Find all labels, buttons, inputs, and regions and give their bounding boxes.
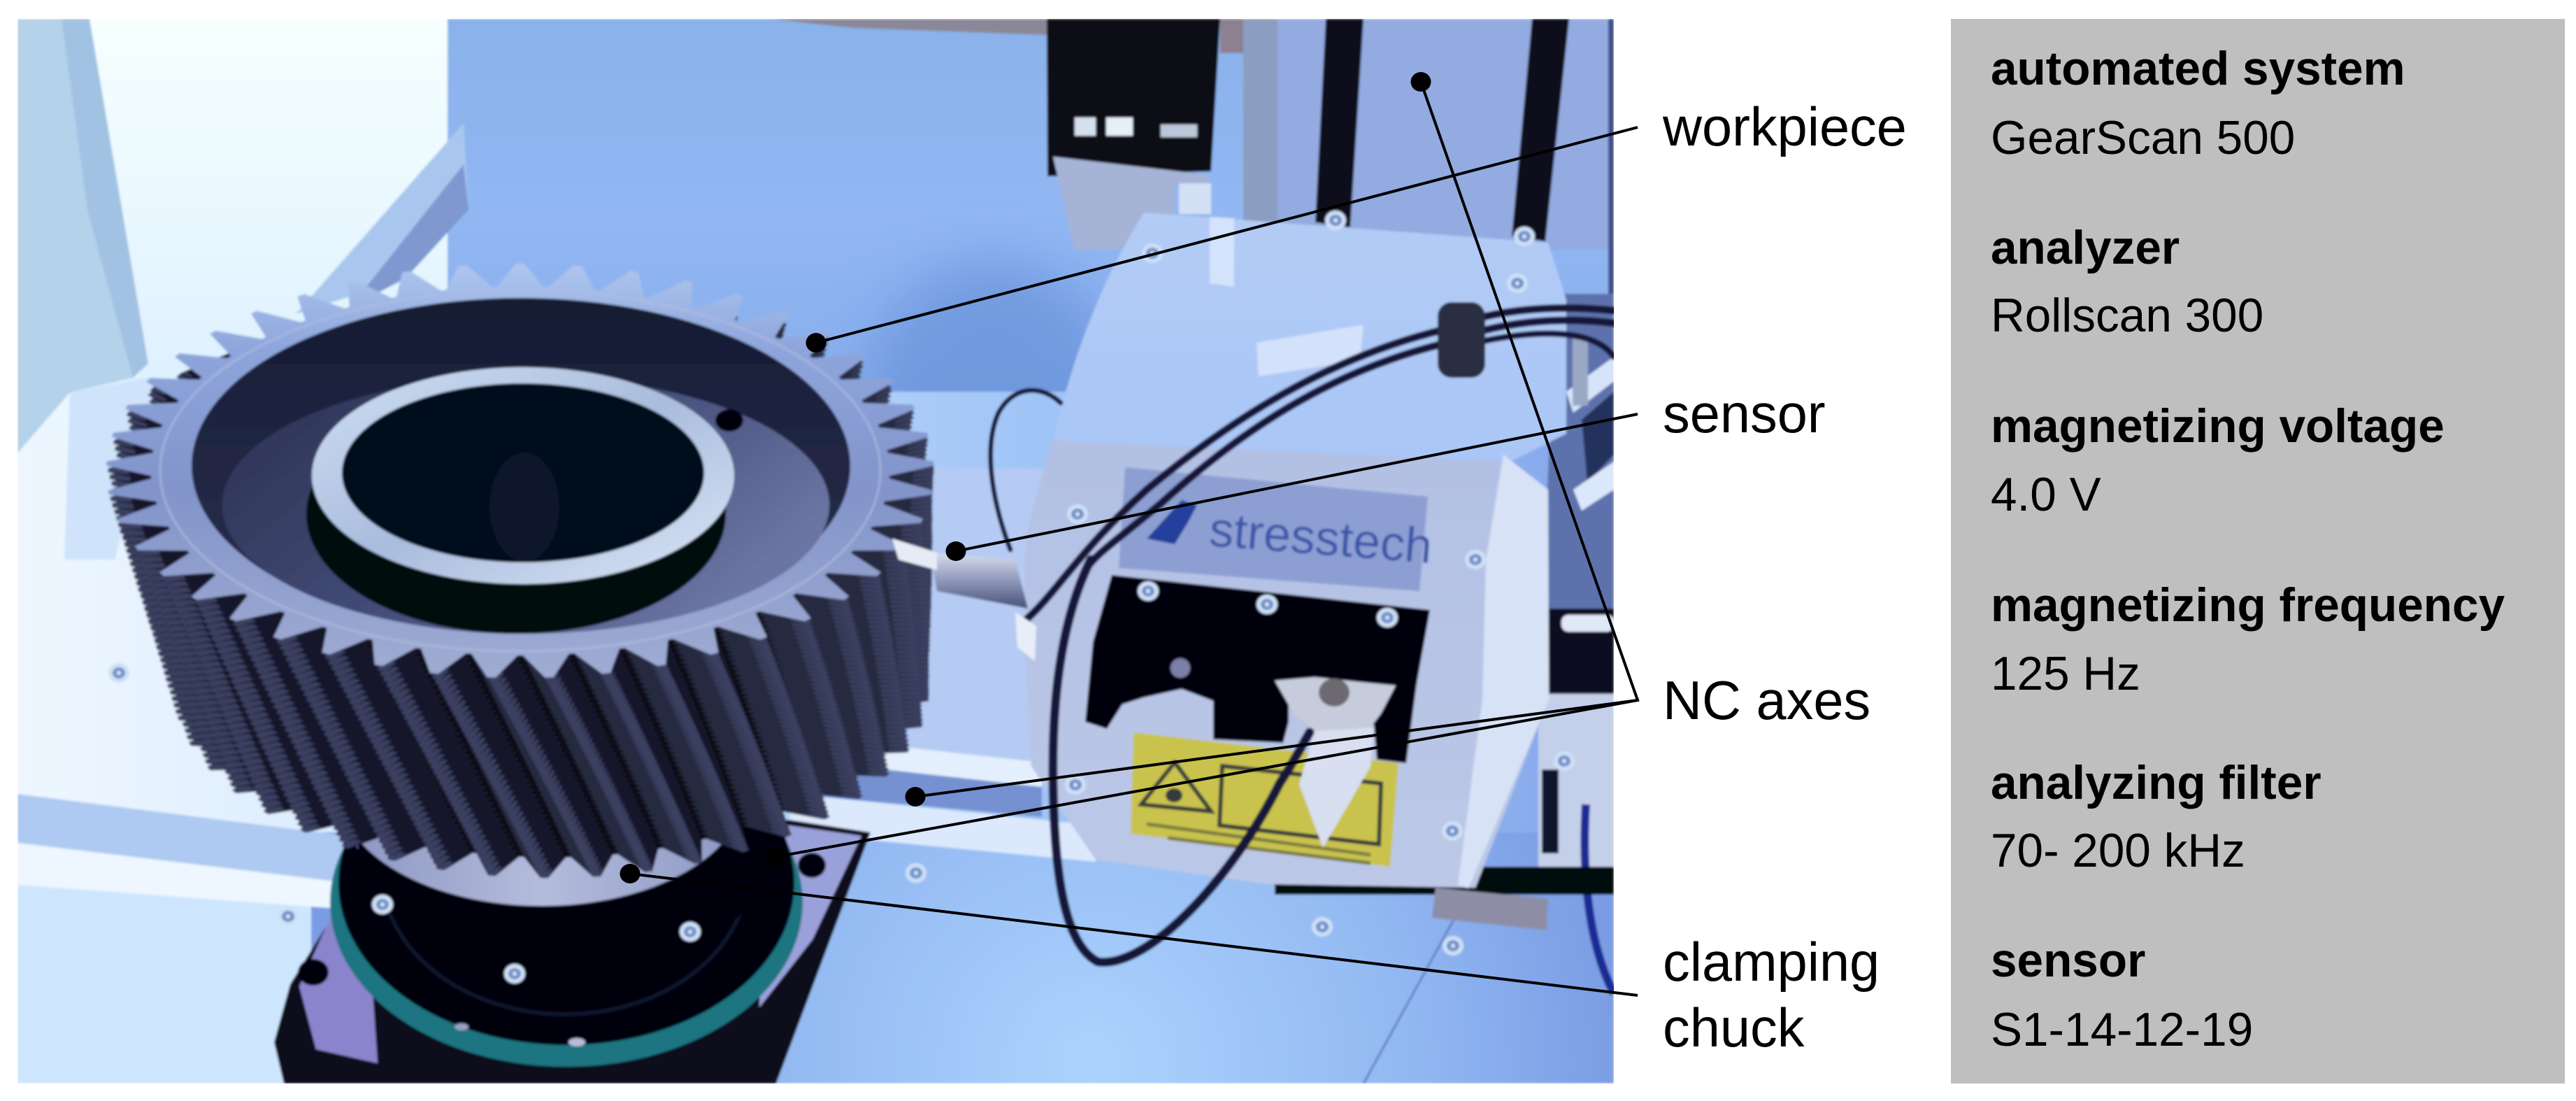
yellow laser warning label (1131, 732, 1398, 867)
left window frame (17, 19, 157, 560)
parameter: analyzer: Rollscan 300 (1991, 290, 2263, 342)
parameter: magnetizing frequency: magnetizing frequency (1991, 579, 2505, 632)
label: sensor: sensor (1663, 384, 1826, 444)
label: clamping chuck: clamping (1663, 932, 1880, 993)
sensor head bracket and tip (1275, 677, 1396, 848)
parameter: automated system (1991, 43, 2405, 164)
box screws (108, 211, 1575, 956)
gear flanks (helical teeth) (0, 229, 1107, 988)
parameter: analyzing filter: 70- 200 kHz (1991, 825, 2245, 877)
chuck base plate (274, 808, 871, 1084)
parameter: magnetizing voltage: magnetizing voltage (1991, 400, 2445, 453)
photo background: wall and floor (17, 19, 1614, 1084)
callout: workpiece leader (806, 127, 1638, 353)
label: clamping chuck: chuck (1663, 998, 1805, 1058)
stresstech label (1119, 467, 1434, 591)
diagonal frame strip (296, 123, 468, 314)
parameter: magnetizing voltage: 4.0 V (1991, 469, 2101, 521)
cables (991, 308, 1614, 963)
gear recess and bore (160, 290, 880, 651)
stresstech label: stresstech (1208, 502, 1434, 574)
parameter: sensor: S1-14-12-19 (1991, 1004, 2253, 1056)
parameter: magnetizing frequency (1991, 579, 2505, 700)
panel: measurement parameters (1951, 19, 2565, 1084)
gear top face with teeth (70, 238, 979, 713)
parameter: analyzer: analyzer (1991, 222, 2180, 274)
parameter: magnetizing frequency: 125 Hz (1991, 648, 2140, 700)
photo: gear test rig (0, 19, 1614, 1084)
analyzer housing (1024, 213, 1566, 888)
camera housing (1047, 19, 1220, 250)
parameter: analyzing filter (1991, 757, 2321, 877)
lower black block and blue cable (1275, 609, 1614, 993)
callout: NC axes leaders (765, 72, 1638, 867)
parameter: automated system: automated system (1991, 43, 2405, 95)
black sensor clamp (1085, 575, 1430, 763)
chuck body with green seal (330, 720, 803, 1067)
ferrite core on cable (1438, 302, 1485, 378)
back column with black rails (1243, 19, 1614, 616)
parameter: analyzer (1991, 222, 2263, 342)
parameter: automated system: GearScan 500 (1991, 112, 2295, 164)
label: clamping chuck (1663, 932, 1880, 1058)
sensor rod (892, 539, 1036, 661)
parameter: analyzing filter: analyzing filter (1991, 757, 2321, 809)
parameter: sensor (1991, 935, 2253, 1056)
parameter: sensor: sensor (1991, 935, 2145, 987)
clamping chuck cylinder (339, 675, 745, 906)
label: workpiece: workpiece (1662, 97, 1907, 157)
label: NC axes: NC axes (1663, 671, 1870, 731)
parameter: magnetizing voltage (1991, 400, 2445, 521)
callout: clamping chuck leader (620, 864, 1638, 995)
callout: sensor leader (945, 414, 1638, 561)
